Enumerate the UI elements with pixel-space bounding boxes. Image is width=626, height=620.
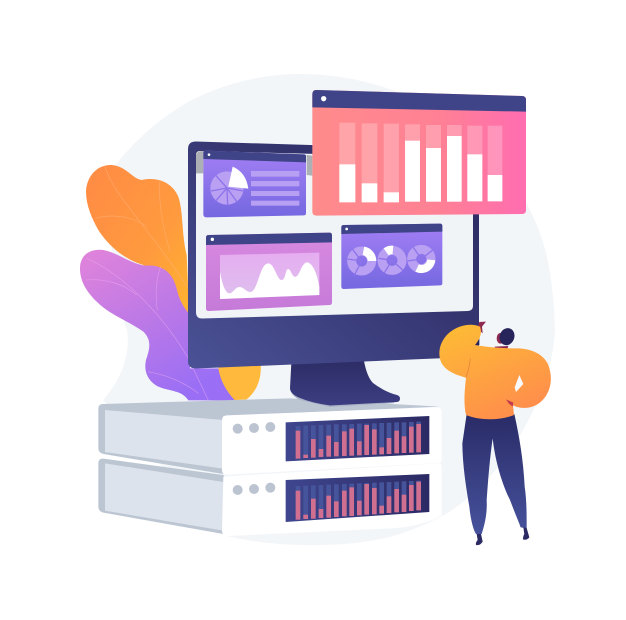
- icon: yellow leaf: [218, 365, 261, 400]
- person feet: [476, 527, 529, 545]
- leaves: [80, 165, 261, 400]
- person: [439, 322, 551, 545]
- lower server unit: [98, 459, 442, 536]
- monitor: [188, 142, 479, 368]
- upper bar display: [286, 416, 429, 461]
- monitor corner behind arm: [473, 337, 479, 345]
- area chart: [220, 253, 319, 299]
- window shadow on screen: [196, 151, 312, 176]
- arm gap: [515, 375, 523, 392]
- bar tracks: [339, 123, 502, 202]
- background blob: [103, 74, 555, 545]
- panel: area chart window: [206, 233, 332, 311]
- text lines: [251, 171, 299, 206]
- person head: [495, 326, 517, 350]
- hand on hip: [506, 399, 513, 407]
- panel: bar chart window: [312, 90, 526, 216]
- lower bar display: [286, 474, 429, 522]
- monitor screen: [196, 151, 473, 318]
- icon: purple leaf: [80, 250, 235, 400]
- upper server unit: [98, 398, 442, 475]
- panel: donut chart window: [341, 224, 442, 289]
- icon: orange leaf: [86, 165, 189, 315]
- panel: pie chart window: [203, 151, 306, 217]
- person sweater: [439, 325, 551, 419]
- donut charts: [347, 246, 435, 276]
- bar values: [339, 136, 502, 202]
- person raised hand: [477, 322, 486, 333]
- pie chart: [210, 167, 248, 206]
- monitor stand: [290, 355, 400, 407]
- upper status lights: [233, 422, 275, 434]
- person legs: [462, 414, 527, 534]
- lower status lights: [233, 483, 275, 495]
- server stack: [98, 398, 442, 536]
